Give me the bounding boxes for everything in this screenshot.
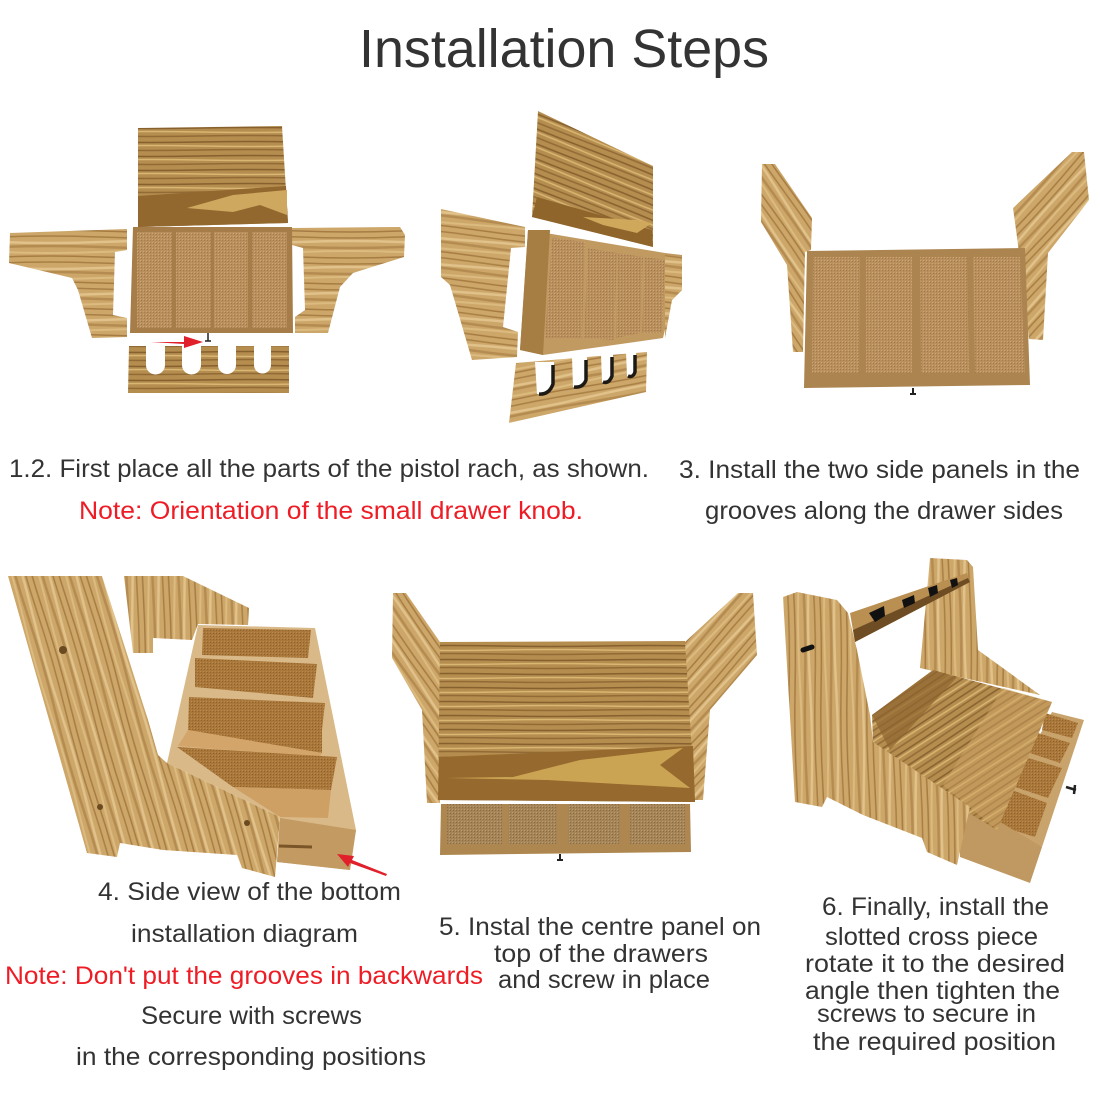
right wing [1013, 152, 1089, 340]
arrow: groove direction [337, 854, 387, 876]
far side panel [124, 576, 249, 653]
top board [138, 126, 288, 227]
caption: step 6 [805, 893, 1065, 1056]
photo: centre panel [392, 593, 757, 860]
caption: step 4: Secure with screws [141, 1002, 362, 1030]
drawer interior [167, 625, 356, 870]
photo: finished rack [783, 558, 1084, 883]
drawer [804, 248, 1030, 394]
left side panel [9, 229, 127, 338]
caption: step 5 [439, 913, 761, 994]
drawer [130, 227, 293, 341]
title: Installation Steps [359, 19, 769, 79]
slotted cross piece [509, 352, 647, 423]
screw [803, 647, 812, 650]
top board [532, 111, 653, 247]
caption: knob note: Note: Orientation of the small drawer knob. [79, 497, 583, 525]
near side panel [8, 576, 280, 877]
photo: side view of bottom [8, 576, 387, 877]
caption: step 6: screws to secure in [817, 1000, 1036, 1028]
caption: step 6: the required position [813, 1028, 1056, 1056]
drawer [440, 804, 691, 860]
caption: step 6: slotted cross piece [825, 923, 1038, 951]
drawer [960, 712, 1084, 883]
caption: step 4: in the corresponding positions [76, 1043, 426, 1071]
caption: step 4: 4. Side view of the bottom [98, 878, 401, 906]
caption: step 5: top of the drawers [494, 940, 708, 968]
caption: step 6: rotate it to the desired [805, 950, 1065, 978]
caption: step 4: installation diagram [131, 920, 358, 948]
centre board [438, 641, 695, 802]
left wing [761, 164, 812, 352]
caption: step 1.2: 1.2. First place all the parts of the pistol rach, as shown. [9, 455, 649, 483]
caption: step 6: angle then tighten the [805, 977, 1060, 1005]
screw holes [59, 646, 250, 826]
near side panel [783, 592, 970, 865]
slotted cross piece [128, 346, 289, 393]
left wing [392, 593, 440, 803]
left side panel [441, 209, 525, 360]
slotted cross piece [850, 573, 970, 642]
caption: step 6: 6. Finally, install the [822, 893, 1049, 921]
caption: step 4 [5, 878, 483, 1071]
caption: step 3 line 2: grooves along the drawer sides [705, 497, 1063, 525]
caption: step 4: Note: Don't put the grooves in backwards [5, 962, 483, 990]
photo: side panels installed [761, 152, 1089, 394]
photo: parts laid out flat [9, 126, 405, 393]
far side panel [920, 558, 1040, 695]
top board [872, 670, 1052, 830]
caption: step 5: 5. Instal the centre panel on [439, 913, 761, 941]
arrow: knob orientation [151, 336, 203, 348]
right side panel [292, 227, 405, 333]
caption: step 5: and screw in place [498, 966, 710, 994]
photo: parts in perspective [441, 111, 682, 423]
right wing [685, 593, 757, 800]
caption: step 3 line 1: 3. Install the two side panels in the [679, 456, 1080, 484]
drawer [520, 230, 682, 355]
